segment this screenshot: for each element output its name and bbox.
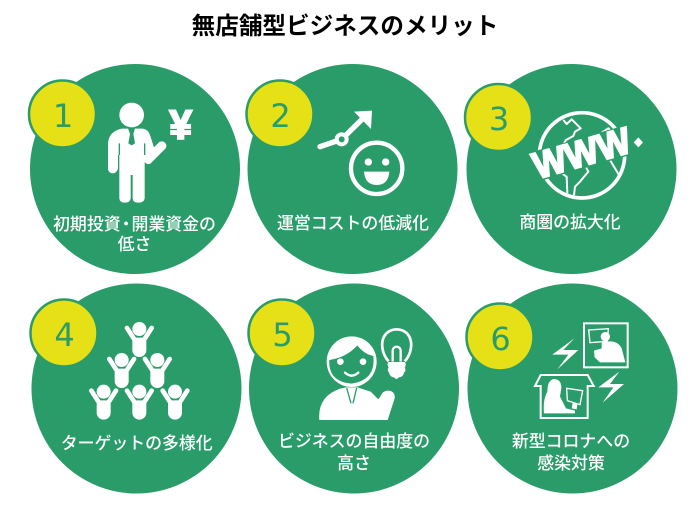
label 4: ターゲットの多様化 — [61, 434, 213, 453]
label 1 second line: 低さ — [118, 235, 151, 254]
icon: www globe — [526, 113, 643, 198]
circle background 3 — [466, 64, 676, 274]
number badge 4 — [30, 300, 98, 366]
number badge 6 — [466, 304, 534, 370]
circle background 6 — [468, 284, 678, 494]
number badge 1: 1 — [53, 97, 73, 135]
icon: person with light bulb — [319, 329, 411, 420]
www text: WWW — [528, 119, 636, 187]
label 1: 初期投資・開業資金の — [53, 215, 216, 234]
panel: merit 1 — [29, 64, 240, 274]
number badge 5: 5 — [272, 316, 293, 354]
yen symbol: ¥ — [169, 102, 192, 148]
title: 無店舗型ビジネスのメリット — [192, 13, 498, 40]
label 5: ビジネスの自由度の — [278, 432, 430, 451]
number badge 4: 4 — [54, 316, 75, 354]
circle background 4 — [32, 284, 242, 494]
number badge 2 — [246, 80, 314, 148]
panel: merit 4 — [30, 284, 242, 494]
label 5 second line: 高さ — [337, 454, 371, 473]
circle background 5 — [249, 284, 459, 494]
number badge 6: 6 — [490, 320, 511, 358]
label 6: 新型コロナへの — [512, 432, 630, 451]
label 6 second line: 感染対策 — [537, 454, 605, 473]
number badge 2: 2 — [270, 97, 291, 135]
panel: merit 6 — [466, 284, 678, 494]
panel: merit 3 — [465, 64, 676, 274]
number badge 3: 3 — [489, 100, 509, 138]
circle background 2 — [248, 64, 458, 274]
panel: merit 2 — [246, 64, 458, 274]
label 3: 商圏の拡大化 — [519, 213, 621, 232]
icon: remote work house and video call — [535, 323, 628, 418]
icon: businessman with yen — [108, 102, 192, 203]
number badge 1 — [29, 80, 96, 148]
label 2: 運営コストの低減化 — [277, 214, 429, 233]
number badge 3 — [465, 84, 532, 151]
icon: pyramid of people — [91, 322, 187, 420]
circle background 1 — [30, 64, 240, 274]
icon: cost gauge arrow and smiley — [320, 111, 402, 194]
number badge 5 — [248, 300, 316, 366]
panel: merit 5 — [248, 284, 459, 494]
